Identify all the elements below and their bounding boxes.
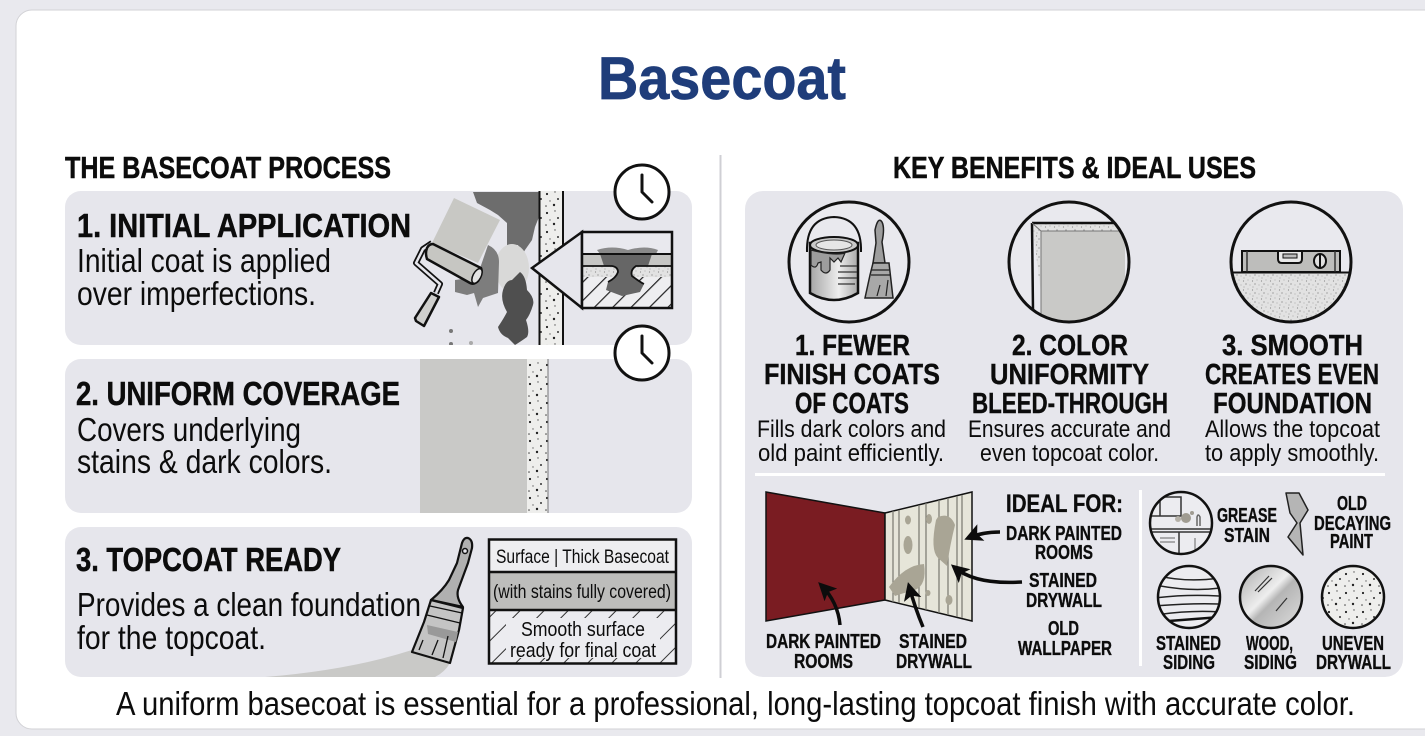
step 3 heading: 3. TOPCOAT READY — [76, 541, 341, 578]
arrow to dark painted room — [821, 585, 840, 625]
label: grease stain: GREASE — [1217, 505, 1277, 527]
benefit 1 heading: FINISH COATS — [764, 359, 940, 391]
heading: key benefits and ideal uses: KEY BENEFITS & IDEAL USES — [893, 150, 1256, 185]
label: uneven drywall — [1316, 633, 1391, 674]
panel: step 3 topcoat ready — [65, 527, 692, 677]
icon: siding lines — [1155, 566, 1220, 628]
benefit 2 heading: BLEED-THROUGH — [972, 388, 1168, 420]
label: uneven drywall: DRYWALL — [1316, 652, 1391, 674]
benefit 1 description — [757, 416, 946, 467]
icon: grease stain kitchen — [1150, 492, 1215, 560]
arrow from stained drywall label — [954, 567, 1022, 582]
layer diagram: Smooth surface — [521, 619, 645, 641]
illustration: stains on wall with roller — [432, 191, 563, 346]
layer diagram: Surface | Thick Basecoat — [496, 547, 670, 568]
benefit 3 description — [1205, 416, 1380, 467]
label: wood siding: SIDING — [1244, 652, 1297, 674]
step 3 description — [77, 586, 421, 656]
icon: paint roller — [415, 243, 484, 326]
benefit 3 heading: 3. SMOOTH — [1222, 330, 1363, 362]
label: uneven drywall: UNEVEN — [1322, 633, 1384, 655]
label: ideal for list: DARK PAINTED — [1006, 523, 1122, 545]
layer diagram: ready for final coat — [510, 640, 656, 662]
layer diagram — [489, 540, 676, 664]
benefit 1 description: Fills dark colors and — [757, 416, 946, 443]
label: stained drywall: STAINED — [899, 631, 967, 653]
label: stained siding: SIDING — [1163, 652, 1215, 674]
label: grease stain — [1217, 505, 1277, 547]
label: ideal for list: WALLPAPER — [1018, 638, 1112, 660]
benefit 3 heading — [1205, 330, 1379, 420]
label: ideal for list: IDEAL FOR: — [1006, 490, 1123, 518]
illustration: uniform gray wall — [420, 359, 548, 513]
benefit 2 description — [968, 416, 1171, 467]
label: old decaying paint — [1314, 493, 1391, 553]
step 3 description: Provides a clean foundation — [77, 586, 421, 623]
step 1 description: Initial coat is applied — [77, 242, 331, 279]
arrow from dark painted rooms label — [968, 532, 1000, 538]
step 2 description: Covers underlying — [77, 411, 301, 448]
benefit 1 heading: OF COATS — [795, 388, 909, 420]
icon: clock 1 — [615, 165, 669, 219]
benefit 1 heading — [764, 330, 940, 420]
title: Basecoat — [598, 45, 846, 112]
layer diagram: (with stains fully covered) — [493, 582, 671, 603]
label: wood siding: WOOD, — [1246, 633, 1293, 655]
label: stained siding — [1156, 633, 1221, 674]
step 3 description: for the topcoat. — [77, 619, 266, 656]
step 1 description — [77, 242, 331, 312]
benefit 3 heading: FOUNDATION — [1213, 388, 1372, 420]
label: ideal for list: STAINED — [1029, 570, 1097, 592]
benefit 2 heading — [972, 330, 1168, 420]
step 2 description: stains & dark colors. — [77, 443, 332, 480]
benefit 3 description: to apply smoothly. — [1205, 440, 1379, 467]
label: ideal for list: ROOMS — [1035, 542, 1093, 564]
icon: paint brush — [412, 538, 472, 663]
stained wallpaper wall — [885, 492, 972, 621]
icon: uneven drywall speckle — [1322, 566, 1384, 628]
label: stained siding: STAINED — [1156, 633, 1221, 655]
benefit 1 heading: 1. FEWER — [795, 330, 910, 362]
label: ideal for list — [1006, 490, 1123, 660]
label: old decaying paint: PAINT — [1330, 531, 1373, 553]
step 1 description: over imperfections. — [77, 275, 316, 312]
icon: paint can and brush — [789, 202, 909, 322]
icon: glossy surface — [1240, 566, 1302, 628]
label: old decaying paint: DECAYING — [1314, 513, 1391, 535]
heading: the basecoat process: THE BASECOAT PROCESS — [65, 150, 391, 185]
benefit 2 heading: UNIFORMITY — [990, 359, 1149, 391]
arrow to stained drywall — [909, 586, 923, 627]
icon: peeling paint chip — [1286, 493, 1308, 555]
label: old decaying paint: OLD — [1337, 493, 1367, 515]
callout: cross-section magnifier — [532, 232, 672, 308]
label: ideal for list: OLD — [1048, 618, 1079, 640]
label: ideal for list: DRYWALL — [1026, 590, 1102, 612]
label: dark painted rooms: DARK PAINTED — [766, 631, 881, 653]
label: stained drywall: DRYWALL — [896, 651, 972, 673]
benefit 3 heading: CREATES EVEN — [1205, 359, 1379, 391]
step 2 heading: 2. UNIFORM COVERAGE — [76, 375, 400, 412]
dark red painted wall — [766, 492, 885, 621]
icon: clock 2 — [615, 326, 669, 380]
label: stained drywall — [896, 631, 972, 673]
label: dark painted rooms — [766, 631, 881, 673]
icon: drywall corner — [1009, 202, 1129, 325]
label: dark painted rooms: ROOMS — [794, 651, 853, 673]
paint swoosh — [265, 650, 450, 677]
panel: key benefits and ideal uses — [745, 191, 1403, 677]
step 2 description — [77, 411, 332, 480]
label: grease stain: STAIN — [1224, 525, 1270, 547]
benefit 2 description: Ensures accurate and — [968, 416, 1171, 443]
panel: step 2 uniform coverage — [65, 359, 692, 513]
label: wood siding — [1244, 633, 1297, 674]
benefit 2 heading: 2. COLOR — [1012, 330, 1128, 362]
benefit 2 description: even topcoat color. — [980, 440, 1159, 467]
panel: step 1 initial application — [65, 191, 692, 346]
illustration: room corner — [766, 492, 1022, 627]
benefit 3 description: Allows the topcoat — [1205, 416, 1380, 443]
benefit 1 description: old paint efficiently. — [758, 440, 944, 467]
step 1 heading: 1. INITIAL APPLICATION — [77, 207, 411, 244]
icon: spirit level on smooth surface — [1230, 200, 1352, 324]
